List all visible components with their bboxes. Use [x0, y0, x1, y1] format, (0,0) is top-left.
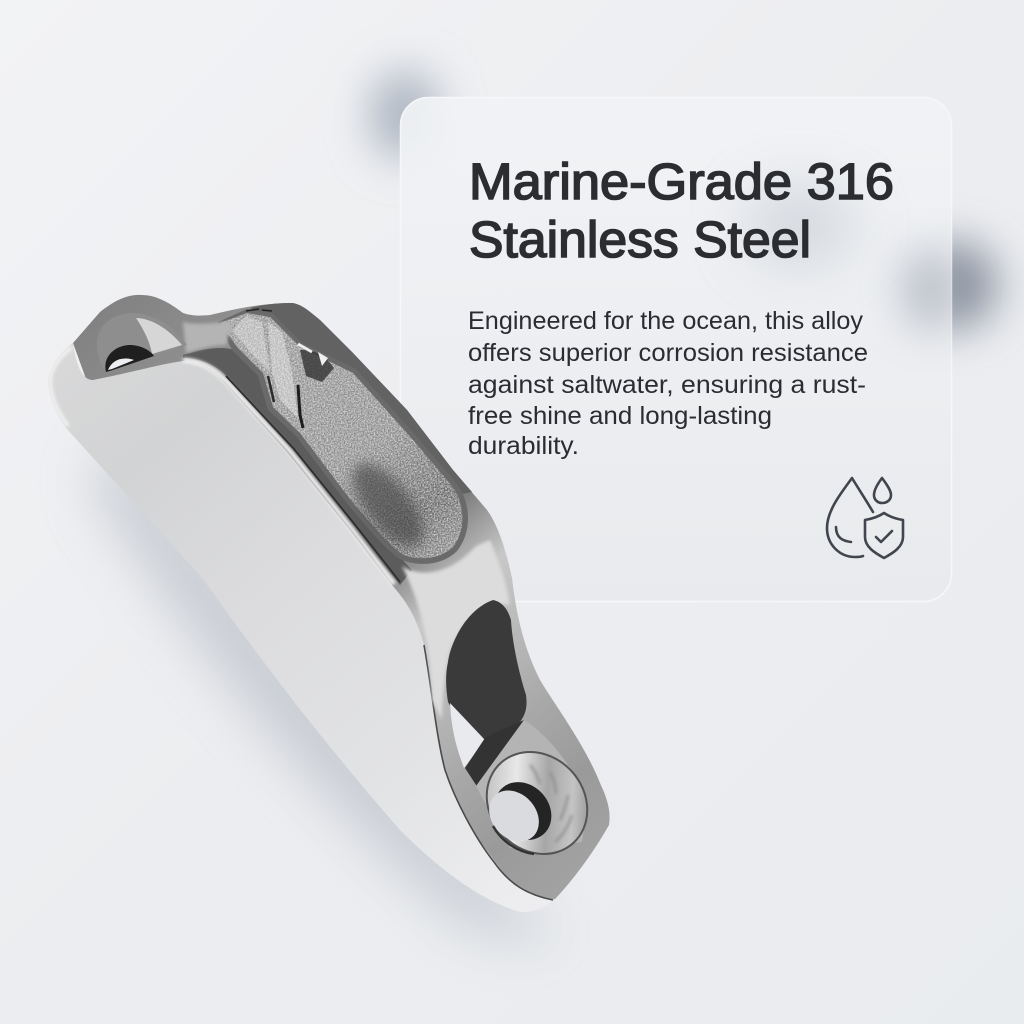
- bright bridge between pocket and window: [402, 540, 510, 720]
- dark lip below hole: [493, 826, 534, 854]
- hole opening: [108, 358, 134, 370]
- product: stainless steel clam cleat: [48, 295, 610, 912]
- blurred background blob: top: [371, 71, 439, 159]
- heading: Marine-Grade 316: [469, 153, 894, 210]
- dark rim line: [226, 376, 400, 582]
- countersink: [466, 731, 608, 875]
- blurred background blob: right: [913, 243, 997, 327]
- rough land around hole: [476, 720, 588, 848]
- cavity grain: [220, 313, 462, 558]
- product shadow: [90, 440, 560, 945]
- lower screw hole: [466, 720, 608, 875]
- dark hole wall: [105, 345, 154, 372]
- cavity floor: [220, 313, 462, 558]
- body text: Engineered for the ocean, this alloy: [468, 307, 864, 335]
- body text: against saltwater, ensuring a rust-: [468, 371, 866, 399]
- background triangle through window: [450, 703, 485, 768]
- lower face edge line: [424, 645, 553, 900]
- hole opening: [479, 780, 549, 852]
- countersink: [97, 313, 187, 373]
- countersink highlight: [136, 318, 182, 354]
- dark upper rim: [250, 303, 472, 494]
- heading: Stainless Steel: [469, 211, 811, 268]
- dark strut below triangle: [465, 720, 524, 788]
- pocket cavity: [215, 305, 475, 570]
- highlight rim along face: [183, 360, 394, 584]
- clam cleat polished face: [48, 343, 553, 912]
- brushed streaks: [530, 765, 572, 842]
- cavity rim: [218, 309, 468, 564]
- jaw tooth dark marks: [246, 309, 334, 428]
- upper metal tail and rough bridge: [183, 322, 232, 353]
- dark hole wall: [483, 771, 563, 851]
- dark band between face and pocket: [183, 348, 412, 585]
- body text: free shine and long-lasting: [468, 402, 772, 430]
- soft blob seen through card: [745, 185, 855, 265]
- body text: offers superior corrosion resistance: [468, 339, 868, 367]
- cavity shadow: [340, 452, 436, 558]
- jaw teeth: [232, 316, 298, 418]
- upper screw hole: [97, 313, 187, 373]
- blob edge seen through card: [904, 250, 956, 330]
- icon: water drops with shield: [827, 478, 903, 558]
- glass card: [400, 98, 952, 602]
- clam cleat metal body: [73, 295, 610, 900]
- dark window through the cleat: [446, 600, 527, 752]
- body text: durability.: [468, 432, 579, 460]
- bright rim on the left of the face: [50, 347, 72, 426]
